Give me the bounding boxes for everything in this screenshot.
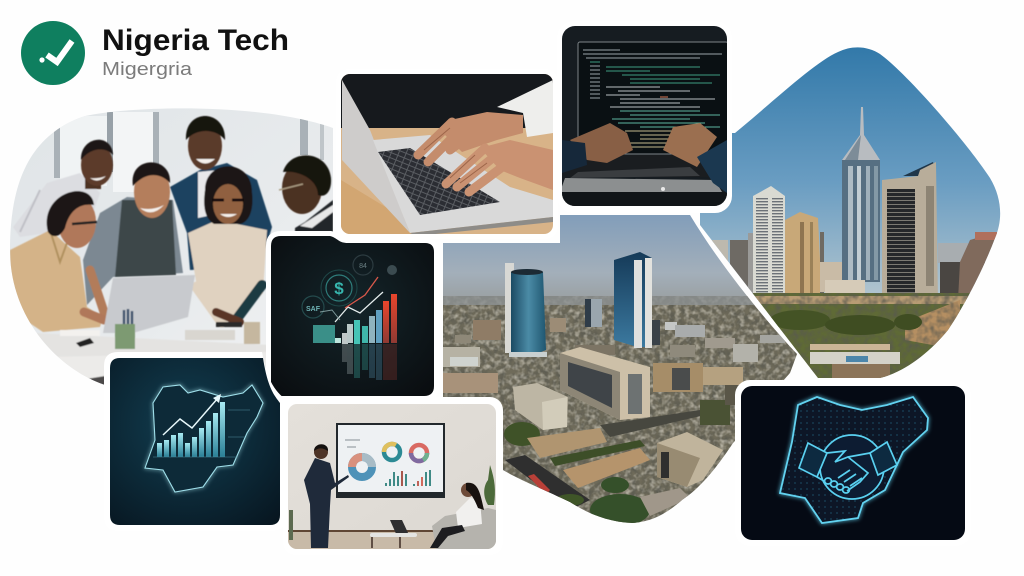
laptop lid: [342, 80, 410, 233]
panel: coding laptop: [557, 21, 732, 213]
central spire tower: [842, 107, 880, 282]
rising bars: [335, 294, 397, 344]
centre man: [83, 162, 183, 312]
mid-right blocks: [443, 347, 743, 393]
panel: laptop typing: [341, 74, 553, 234]
photo: skyline diamond: [700, 40, 1010, 383]
subtitle: Migergria: [102, 59, 193, 79]
panel: presentation room: [283, 397, 503, 555]
woman: [188, 166, 267, 322]
panel: handshake over Nigeria: [735, 380, 971, 546]
laptop base: [373, 135, 553, 233]
map outline: [780, 397, 928, 523]
right low-rise buildings: [938, 232, 997, 302]
hands: [418, 80, 553, 192]
main beige block: [560, 347, 650, 420]
teal donut chart: [384, 444, 400, 460]
park ground: [752, 293, 970, 378]
front-left man: [10, 191, 104, 332]
ground greenery and dirt: [504, 385, 755, 526]
right man: [279, 155, 333, 232]
top coin: 84: [359, 263, 367, 270]
table and laptop: [38, 274, 266, 385]
small coin: SAF: [306, 306, 321, 313]
title: Nigeria Tech: [102, 24, 289, 57]
small coin: [302, 296, 324, 318]
white striped tower: [753, 186, 785, 296]
beige dark-window tower: [882, 162, 938, 303]
panel: Nigeria growth map: [104, 352, 286, 531]
tan tower: [785, 212, 824, 300]
seated woman on sofa: [430, 483, 496, 549]
plant: [484, 465, 495, 505]
growth bars: [157, 402, 225, 457]
trend arrows: [320, 277, 383, 322]
hands: [562, 123, 727, 193]
map outline: [145, 385, 263, 492]
photo: aerial city: [440, 210, 800, 536]
bar reflection: [342, 344, 397, 380]
photo: team around laptop: [10, 108, 333, 385]
multi-colour donut chart: [411, 445, 427, 461]
trend arrow: [163, 394, 221, 435]
circle and handshake: [799, 435, 897, 499]
dollar coin: $: [334, 279, 344, 298]
icon: green check circle: [21, 21, 85, 85]
top coin: [353, 255, 397, 275]
distant blocks: [455, 299, 785, 362]
logo: [21, 21, 289, 85]
lower-right building: [657, 432, 723, 487]
twin slab tower: [614, 252, 652, 348]
presenter: [304, 444, 349, 548]
back-left man: [13, 140, 113, 237]
back-centre man: [170, 116, 272, 270]
midrise base: [820, 262, 865, 293]
keyboard and base: [562, 167, 727, 206]
lower-left block: [513, 383, 568, 430]
keyboard: [378, 148, 500, 215]
screen with code: [578, 42, 728, 154]
left low-rise buildings: [712, 233, 754, 293]
teal card: [313, 325, 335, 343]
large donut chart: [352, 457, 372, 477]
projection screen: [336, 423, 445, 498]
panel: financial chart: [266, 231, 439, 401]
small bar charts: [385, 470, 431, 486]
dollar coin: [321, 270, 357, 306]
round glass tower: [505, 263, 547, 357]
coffee table and laptop: [370, 520, 417, 548]
